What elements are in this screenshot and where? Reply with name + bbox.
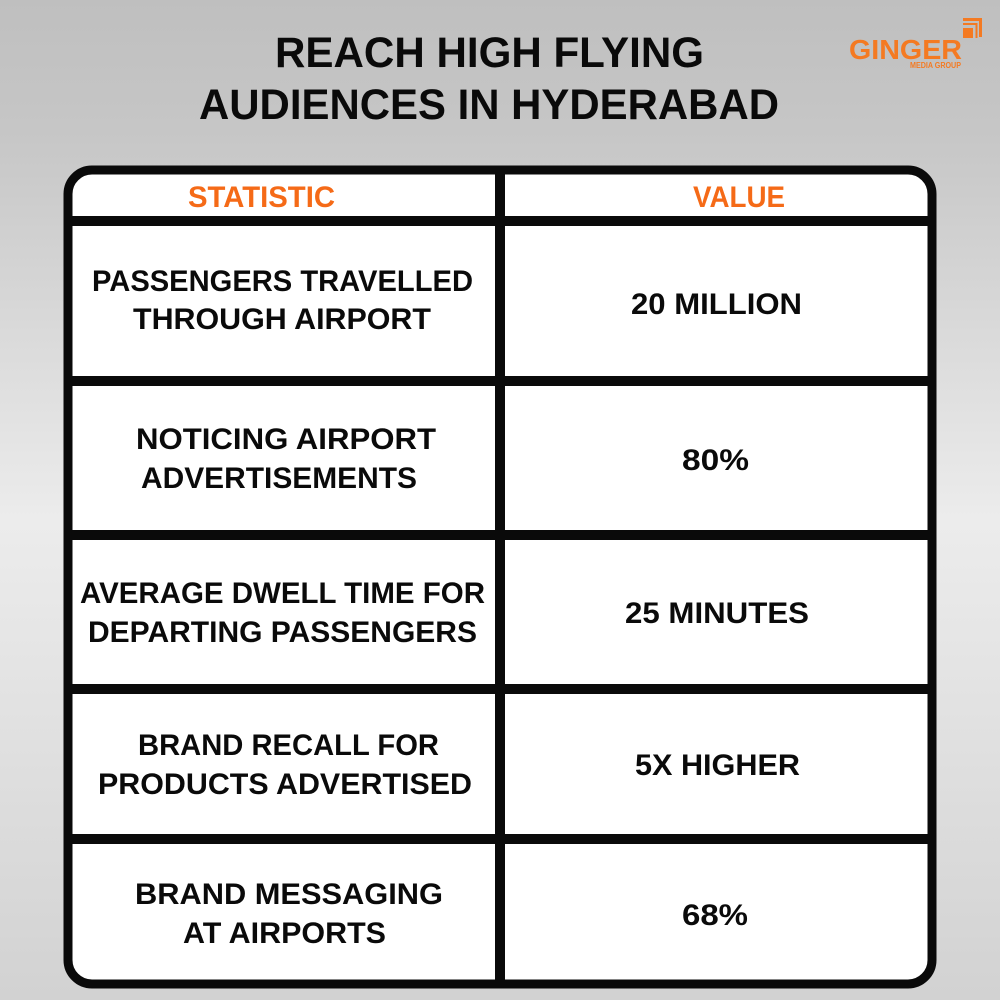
table bbox=[64, 166, 936, 988]
row 2 value: 80% bbox=[682, 444, 749, 477]
row dividers bbox=[64, 216, 936, 844]
table background and outline bbox=[68, 170, 932, 984]
row 4 value: 5X HIGHER bbox=[635, 749, 800, 782]
row 3 value: 25 MINUTES bbox=[625, 597, 809, 630]
title: AUDIENCES IN HYDERABAD bbox=[199, 81, 779, 129]
title: REACH HIGH FLYING bbox=[275, 29, 704, 77]
row 1 label: PASSENGERS TRAVELLED bbox=[92, 265, 473, 298]
logo: Ginger Media Group bbox=[849, 18, 982, 70]
row 3 label: AVERAGE DWELL TIME FOR bbox=[80, 577, 485, 610]
column divider bbox=[495, 166, 505, 988]
logo: Ginger Media Group: MEDIA GROUP bbox=[910, 61, 962, 70]
row 3 label: DEPARTING PASSENGERS bbox=[88, 616, 477, 649]
row 5 value: 68% bbox=[682, 899, 748, 932]
header: value: VALUE bbox=[693, 181, 785, 214]
row 5 label: AT AIRPORTS bbox=[183, 917, 386, 950]
row 5 label bbox=[135, 878, 443, 950]
row 3 label bbox=[80, 577, 485, 649]
row 4 label: BRAND RECALL FOR bbox=[138, 729, 439, 762]
title bbox=[199, 29, 779, 129]
row 4 label: PRODUCTS ADVERTISED bbox=[98, 768, 472, 801]
row 5 label: BRAND MESSAGING bbox=[135, 878, 443, 911]
row 4 label bbox=[98, 729, 472, 801]
row 2 label: NOTICING AIRPORT bbox=[136, 423, 436, 456]
row 1 value: 20 MILLION bbox=[631, 288, 802, 321]
header: statistic: STATISTIC bbox=[188, 181, 335, 214]
row 2 label: ADVERTISEMENTS bbox=[141, 462, 417, 495]
row 1 label bbox=[92, 265, 473, 336]
row 2 label bbox=[136, 423, 436, 495]
row 1 label: THROUGH AIRPORT bbox=[133, 303, 431, 336]
logo: Ginger Media Group: GINGER bbox=[849, 34, 962, 65]
